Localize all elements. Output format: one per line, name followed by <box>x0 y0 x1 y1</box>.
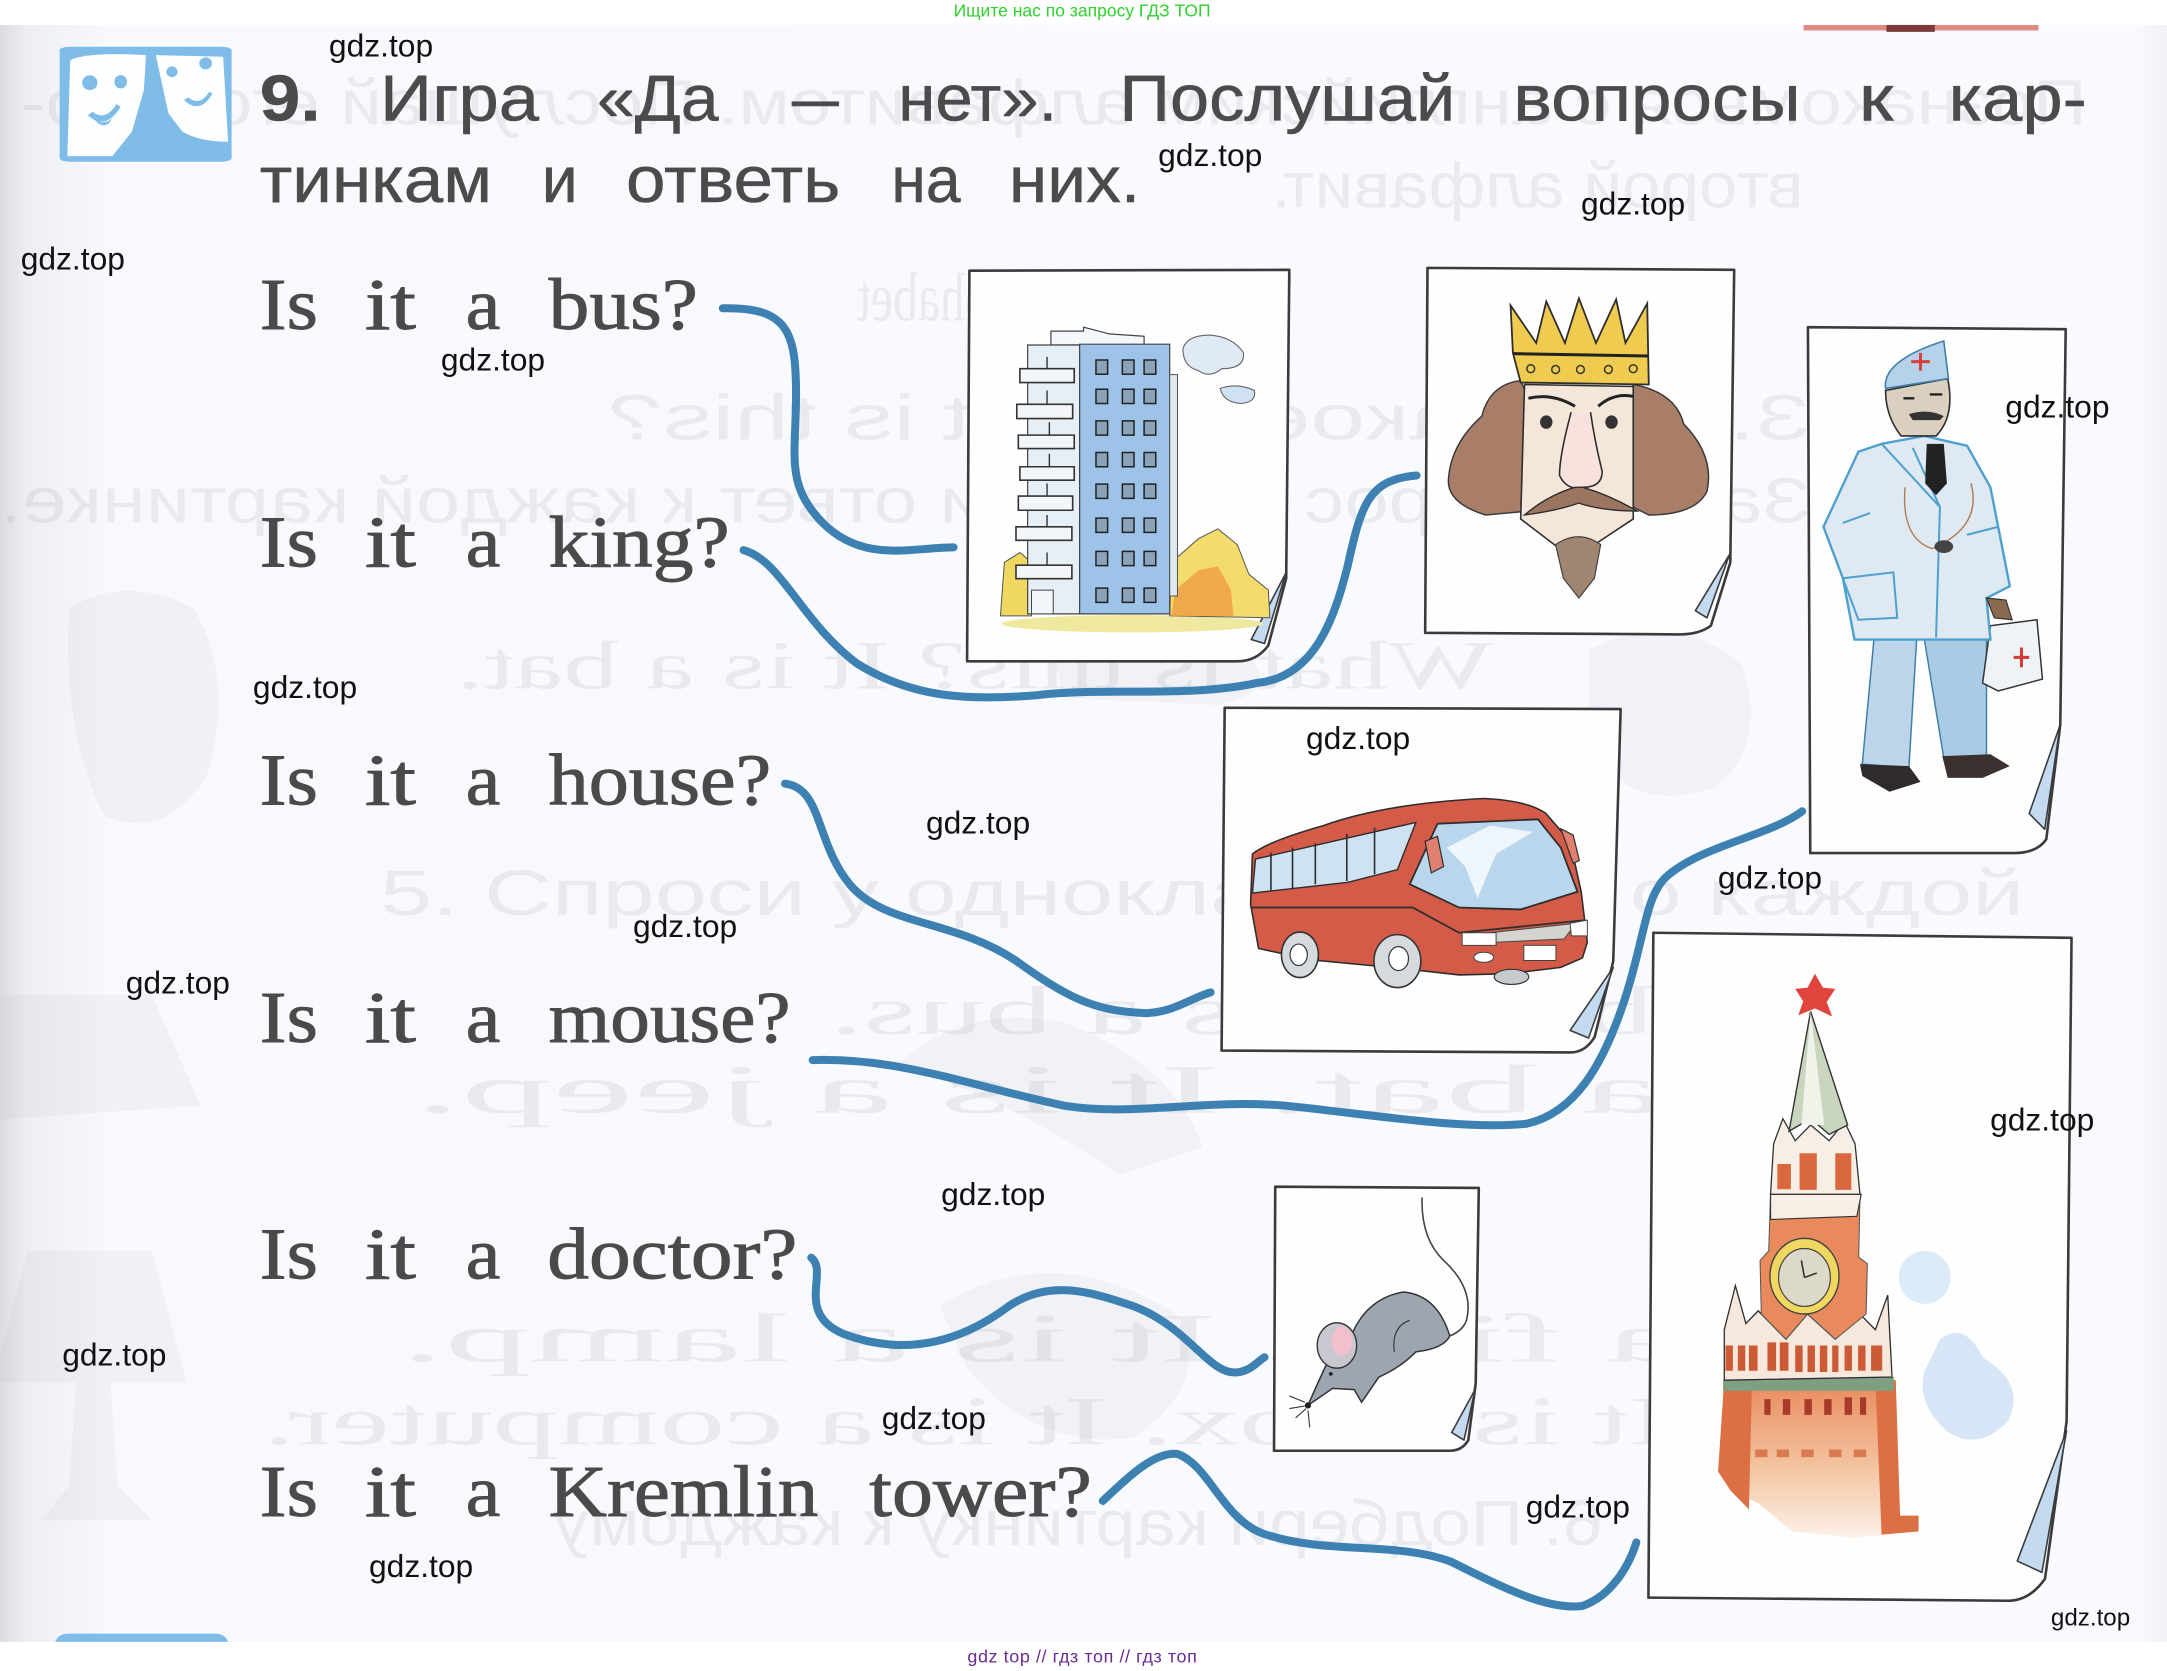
ghost illustrations showing through from reverse page <box>0 591 1751 1520</box>
question: Is it a king?: it <box>365 502 416 583</box>
ghost text showing through from reverse page: Познакомься с английским алфавитом. Послушай его и по- <box>21 67 2087 138</box>
question: Is it a house? <box>260 739 771 820</box>
question: Is it a Kremlin tower?: it <box>365 1451 416 1532</box>
card: mouse <box>1274 1187 1479 1451</box>
question: Is it a bus? <box>260 264 698 345</box>
ghost text showing through from reverse page: It is a fish. It is a lamp. <box>401 1299 1990 1376</box>
question: Is it a doctor? <box>260 1213 797 1294</box>
star <box>1795 974 1835 1017</box>
beard <box>1556 537 1601 598</box>
question: Is it a mouse?: mouse? <box>549 977 791 1058</box>
watermark labels: gdz.top <box>1158 137 1262 173</box>
ghost text showing through from reverse page: второй алфавит. <box>1271 150 1804 221</box>
question: Is it a doctor?: a <box>466 1213 500 1294</box>
ghost text showing through from reverse page: 6. Подбери картинку к каждому <box>553 1488 1603 1559</box>
card: Kremlin tower <box>1648 933 2072 1601</box>
moustache <box>1525 487 1637 515</box>
question: Is it a doctor?: doctor? <box>547 1213 797 1294</box>
top banner text: Ищите нас по запросу ГДЗ ТОП <box>954 1 1211 21</box>
question: Is it a house?: a <box>466 739 500 820</box>
heading <box>260 61 2087 216</box>
card: apartment building <box>967 270 1289 661</box>
trim and lights <box>1251 908 1585 933</box>
tower base <box>1718 1380 1919 1538</box>
question: Is it a Kremlin tower?: tower? <box>869 1451 1092 1532</box>
watermark labels: gdz.top <box>1526 1489 1630 1525</box>
heading: Послушай <box>1119 61 1455 134</box>
coat <box>1823 436 2010 640</box>
connector: bus question to building <box>723 308 954 551</box>
question: Is it a house?: house? <box>549 739 771 820</box>
heading: тинкам <box>260 143 492 216</box>
heading: к <box>1859 61 1894 134</box>
ghost text showing through from reverse page: It is a bat. It is a jeep. <box>415 1051 1990 1128</box>
heading: Игра <box>380 61 540 134</box>
watermark labels: gdz.top <box>126 965 230 1001</box>
ghost text showing through from reverse page: The English Alphabet <box>857 259 1292 336</box>
watermark labels: gdz.top <box>1581 185 1685 221</box>
ghost text showing through from reverse page: It is a fox. It is a computer. <box>263 1382 1672 1459</box>
watermark labels: gdz.top <box>1718 860 1822 896</box>
watermark labels: gdz.top <box>2005 388 2110 424</box>
heading: «Да <box>597 61 720 134</box>
question: Is it a mouse?: a <box>466 977 500 1058</box>
clock section <box>1760 1194 1867 1339</box>
ghost text showing through from reverse page: 5. Спроси у одноклассников о каждой <box>380 858 2025 929</box>
heading: и <box>542 143 578 216</box>
heading: ответь <box>626 143 840 216</box>
question: Is it a king?: king? <box>549 502 730 583</box>
card: king <box>1425 268 1734 634</box>
medical bag <box>1983 620 2042 691</box>
watermark labels: gdz.top <box>926 804 1030 840</box>
watermark labels: gdz.top <box>253 669 357 705</box>
stethoscope <box>1905 483 1973 549</box>
ghost text showing through from reverse page: What is this? It is a bat. <box>456 626 1493 703</box>
question: Is it a mouse? <box>260 977 791 1058</box>
heading: на <box>891 143 961 216</box>
next exercise icon remnant at bottom <box>55 1634 228 1642</box>
watermark labels: gdz.top <box>329 28 433 64</box>
question: Is it a mouse?: Is <box>260 977 318 1058</box>
ear <box>1317 1323 1357 1368</box>
question: Is it a Kremlin tower?: Is <box>260 1451 318 1532</box>
question: Is it a king?: a <box>466 502 500 583</box>
watermark labels: gdz.top <box>2051 1604 2130 1631</box>
ghost text showing through from reverse page: It is a bag. It is a bus. <box>829 972 1990 1049</box>
windshield <box>1410 819 1577 909</box>
heading: них. <box>1009 143 1140 216</box>
head <box>1886 379 1950 436</box>
card: doctor <box>1808 327 2066 853</box>
question: Is it a Kremlin tower? <box>260 1451 1092 1532</box>
body <box>1251 799 1587 975</box>
question: Is it a doctor?: Is <box>260 1213 318 1294</box>
turrets <box>1771 1119 1860 1194</box>
question: Is it a house?: it <box>365 739 416 820</box>
crown <box>1511 298 1649 385</box>
question: Is it a house?: Is <box>260 739 318 820</box>
hair <box>1448 381 1532 515</box>
question: Is it a doctor?: it <box>365 1213 416 1294</box>
icon: theatre masks <box>60 47 232 162</box>
question: Is it a bus?: Is <box>260 264 318 345</box>
question: Is it a bus?: bus? <box>549 264 698 345</box>
tail <box>1422 1197 1468 1338</box>
watermark labels: gdz.top <box>1306 720 1410 756</box>
clock <box>1770 1238 1839 1314</box>
question: Is it a king? <box>260 502 730 583</box>
red illustration remnant at top <box>1804 25 2038 32</box>
question: Is it a mouse?: it <box>365 977 416 1058</box>
card: bus <box>1222 708 1621 1052</box>
heading: 9. <box>260 61 321 134</box>
watermark labels: gdz.top <box>441 341 545 377</box>
legs <box>1862 640 1917 768</box>
watercolor blots <box>1899 1251 1951 1304</box>
tie <box>1925 444 1947 495</box>
question: Is it a Kremlin tower?: a <box>466 1451 500 1532</box>
heading: кар- <box>1949 61 2087 134</box>
bottom footer text: gdz top // гдз топ // гдз топ <box>967 1647 1197 1667</box>
connector: doctor question to mouse <box>811 1258 1265 1373</box>
connector: Kremlin question to tower <box>1103 1454 1636 1607</box>
ghost text showing through from reverse page: 3. Что такое? What is this? <box>608 383 1810 454</box>
wheels <box>1281 932 1318 977</box>
watermark labels: gdz.top <box>62 1337 166 1373</box>
question: Is it a bus?: a <box>466 264 500 345</box>
connector: mouse question to doctor <box>813 811 1802 1125</box>
side windows <box>1252 822 1416 893</box>
question: Is it a king?: Is <box>260 502 318 583</box>
heading: вопросы <box>1513 61 1801 134</box>
question: Is it a bus?: it <box>365 264 416 345</box>
watermark labels: gdz.top <box>882 1400 986 1436</box>
shoes <box>1860 764 1921 792</box>
battlements <box>1724 1286 1892 1380</box>
spire <box>1789 1012 1848 1134</box>
question: Is it a Kremlin tower?: Kremlin <box>549 1451 818 1532</box>
watermark labels: gdz.top <box>1990 1102 2094 1138</box>
ghost text showing through from reverse page: Задай вопрос и выбери ответ к каждой картинке. <box>0 465 1810 536</box>
connector: king question to king <box>744 475 1417 697</box>
eyes and brows <box>1528 395 1633 406</box>
watermark labels: gdz.top <box>21 241 125 277</box>
watermark labels: gdz.top <box>941 1176 1045 1212</box>
watermark labels: gdz.top <box>633 908 737 944</box>
body <box>1308 1292 1450 1405</box>
nose <box>1559 412 1602 488</box>
cap <box>1885 341 1948 388</box>
heading: нет». <box>898 61 1057 134</box>
hand <box>1987 598 2012 620</box>
face <box>1521 385 1633 549</box>
watermark labels: gdz.top <box>369 1548 473 1584</box>
connector: house question to bus <box>785 784 1211 1013</box>
heading: — <box>792 61 839 134</box>
mirror <box>1425 836 1444 873</box>
